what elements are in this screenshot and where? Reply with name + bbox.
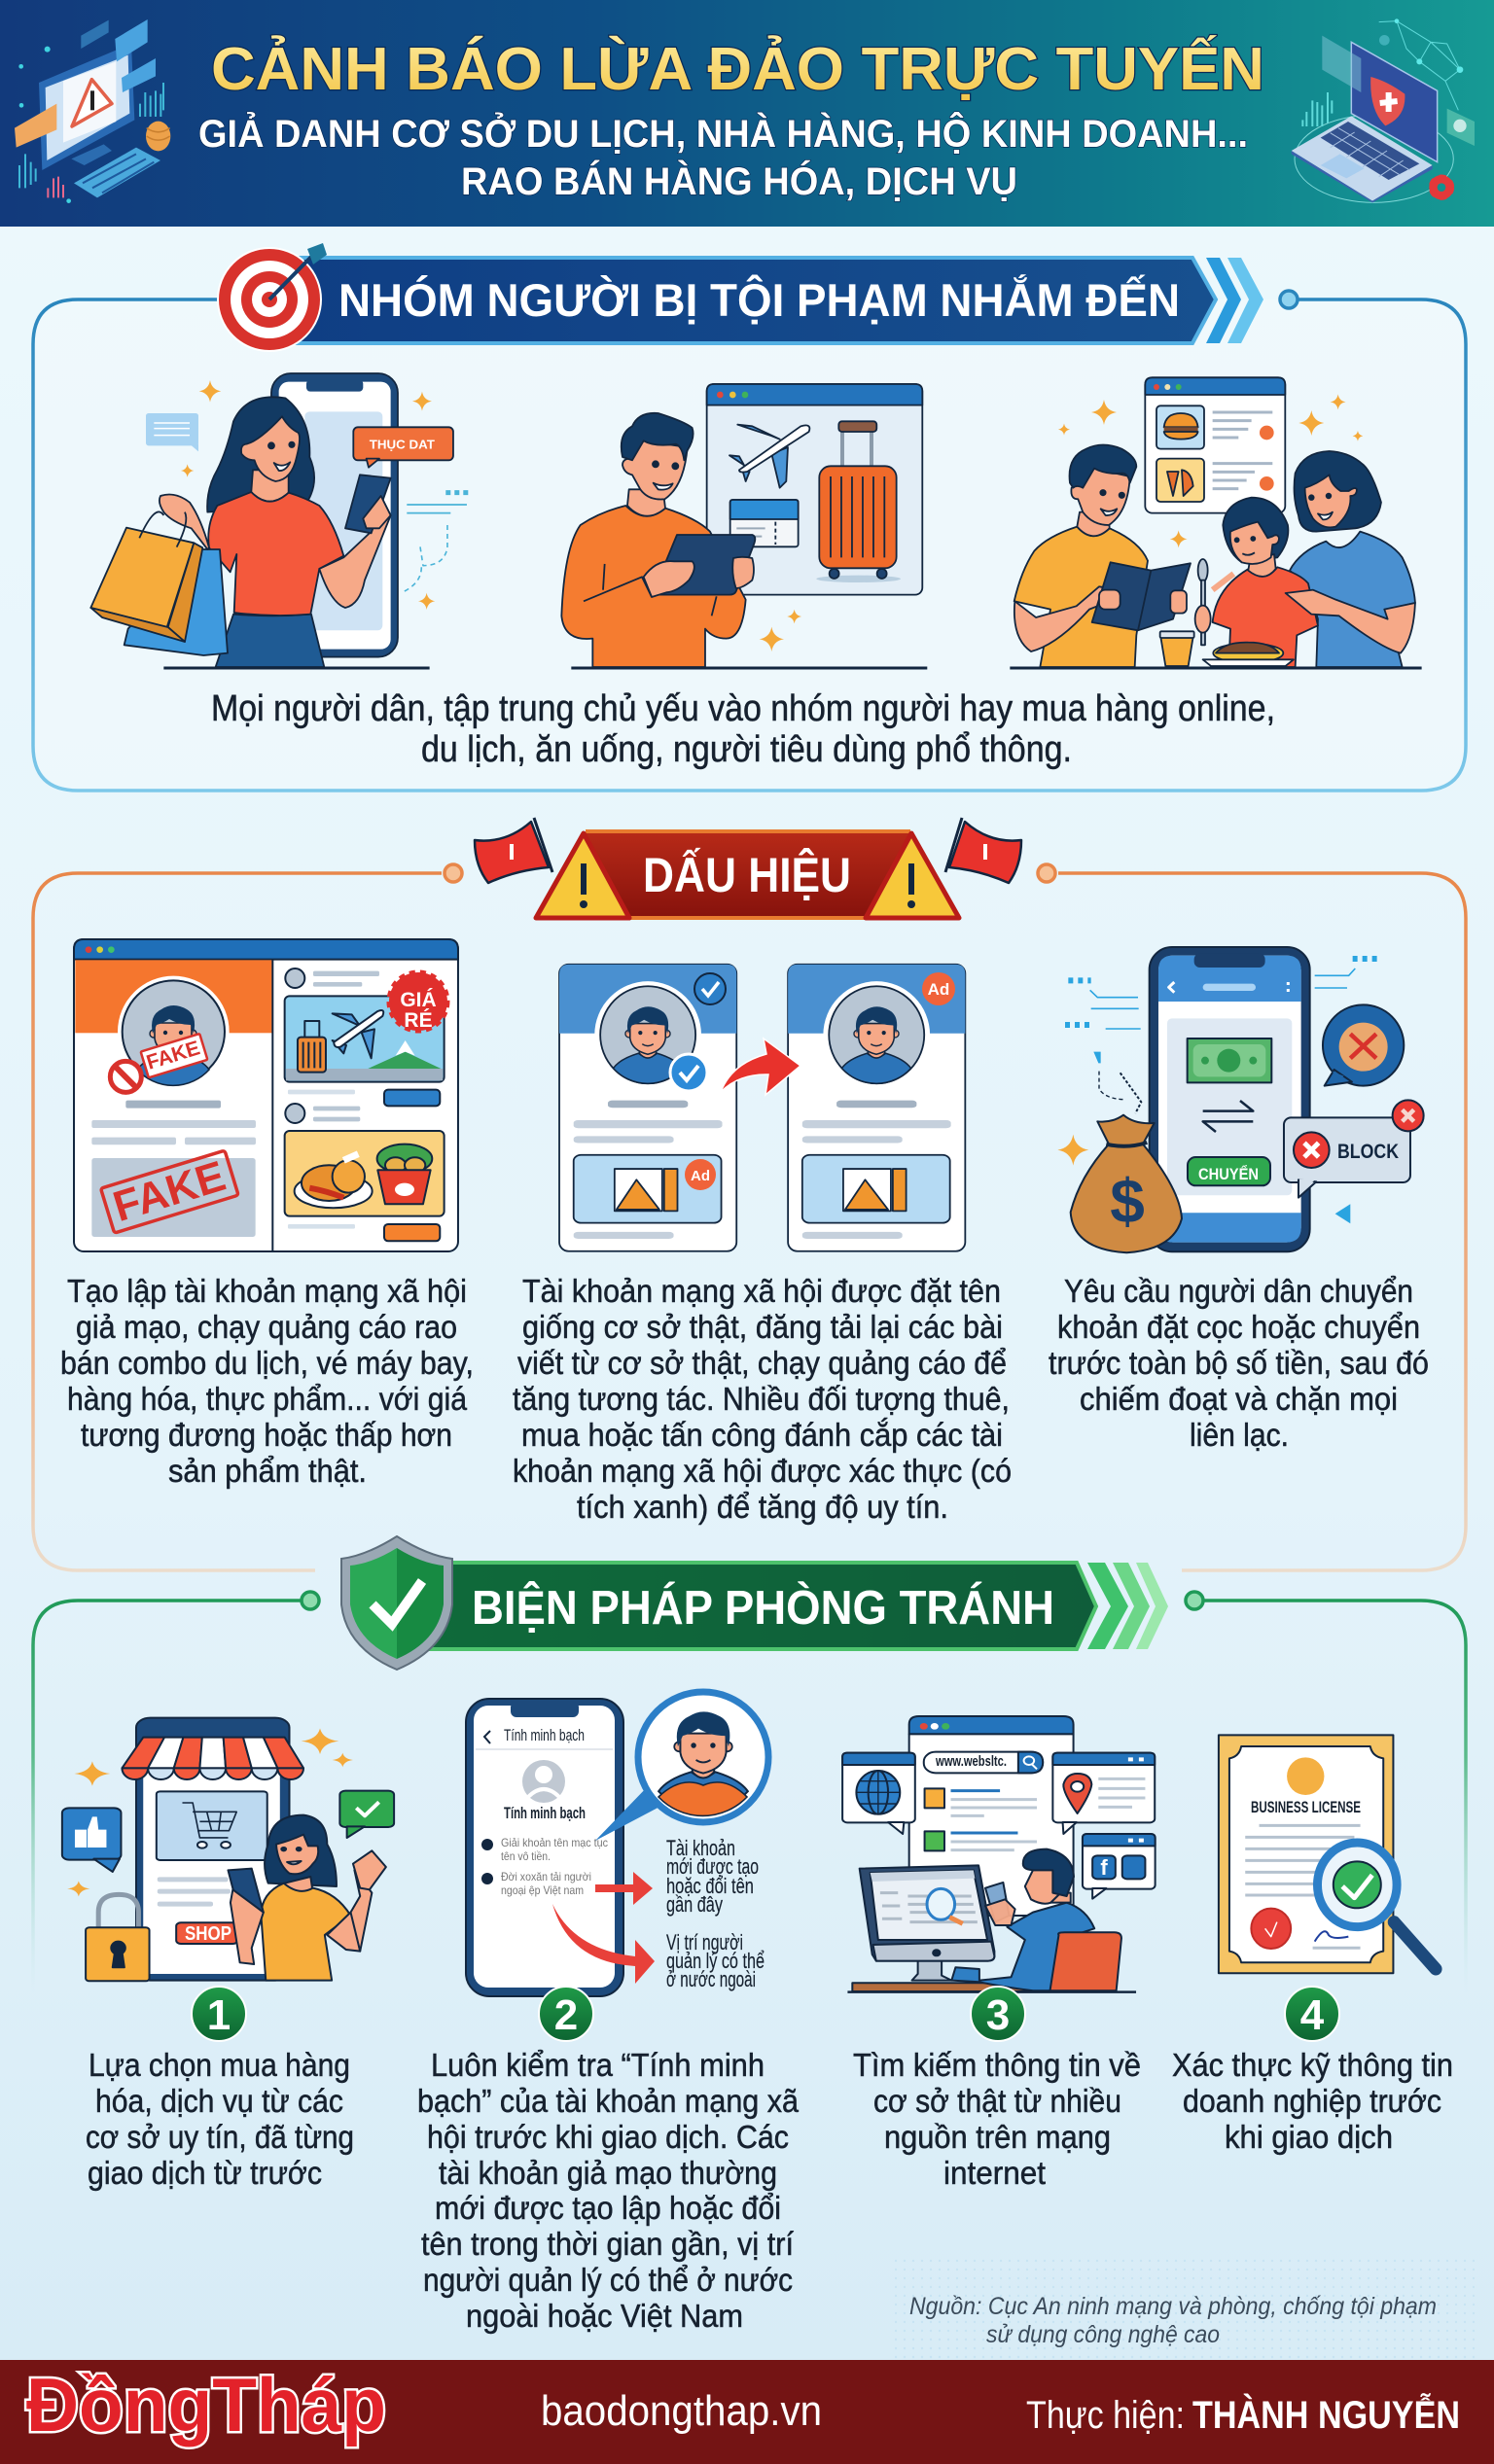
illustration: family dining	[1010, 377, 1422, 668]
illustration: transfer and block: $	[1110, 1166, 1145, 1236]
arrow: new account	[595, 1872, 653, 1905]
subtitle: RAO BÁN HÀNG HÓA, DỊCH VỤ	[461, 158, 1017, 203]
illustration: online shopper: THỤC DAT	[370, 438, 435, 452]
avatar bubble	[595, 1692, 768, 1841]
text: cloned accounts: giống cơ sở thật, đăng tải lại các bài	[522, 1309, 1003, 1345]
icon: shield laptop	[1292, 18, 1475, 202]
text: step 2: tên trong thời gian gần, vị trí	[421, 2226, 794, 2262]
illustration: transparency screen: hoặc đổi tên	[666, 1874, 754, 1898]
arrow: manager location	[552, 1904, 655, 1984]
text: fake accounts: giả mạo, chạy quảng cáo rao	[76, 1309, 457, 1345]
text: target group	[211, 688, 1275, 770]
text: step 4: Xác thực kỹ thông tin	[1172, 2047, 1453, 2083]
illustration: online shopper	[90, 373, 470, 668]
illustration: transparency screen: ngoại ệp Việt nam	[501, 1883, 584, 1897]
text: step 2: ngoài hoặc Việt Nam	[466, 2298, 743, 2334]
website: baodongthap.vn	[541, 2387, 822, 2435]
text: transfer request: chiếm đoạt và chặn mọi	[1080, 1381, 1398, 1417]
text: step 3: nguồn trên mạng	[884, 2119, 1111, 2155]
illustration: business license	[1219, 1735, 1436, 1973]
illustration: transparency screen: Tính minh bạch	[504, 1804, 586, 1822]
illustration: transparency screen: quản lý có thể	[666, 1949, 765, 1973]
text: transfer request: khoản đặt cọc hoặc chuyển	[1057, 1309, 1420, 1345]
source note	[909, 2293, 1437, 2348]
icon: verified badge	[670, 1054, 707, 1091]
text: cloned accounts: viết từ cơ sở thật, chạy quảng cáo để	[517, 1345, 1007, 1381]
illustration: cloned accounts	[559, 965, 965, 1251]
badge: step 1: 1	[207, 1991, 231, 2039]
illustration: trusted shop: SHOP	[185, 1923, 231, 1945]
illustration: transparency screen: Vị trí người	[666, 1930, 743, 1954]
illustration: traveller	[561, 384, 927, 668]
illustration: online research: www.websltc.	[935, 1753, 1007, 1770]
text: fake accounts: bán combo du lịch, vé máy bay,	[60, 1345, 474, 1381]
heading banner: warning signs: DẤU HIỆU	[643, 848, 851, 902]
heading banner: prevention: BIỆN PHÁP PHÒNG TRÁNH	[472, 1581, 1054, 1635]
illustration: transparency screen: Giải khoản tên mạc tục	[501, 1836, 608, 1849]
subtitle: GIẢ DANH CƠ SỞ DU LỊCH, NHÀ HÀNG, HỘ KINH DOANH...	[198, 111, 1248, 156]
illustration: transparency screen: ở nước ngoài	[666, 1967, 756, 1991]
text: transfer request: trước toàn bộ số tiền, sau đó	[1049, 1345, 1429, 1381]
badge: step 2: 2	[554, 1991, 578, 2039]
icon: ad badge	[922, 972, 955, 1005]
arrow	[721, 1038, 800, 1095]
illustration: fake account page: GIÁ	[400, 989, 437, 1011]
heading banner: warning signs	[475, 818, 1021, 918]
icon: small ad badge	[685, 1159, 716, 1190]
icon: warning monitor	[15, 19, 170, 203]
illustration: transparency screen: gần đây	[666, 1892, 723, 1917]
text: fake accounts: sản phẩm thật.	[168, 1453, 367, 1489]
source note: Nguồn: Cục An ninh mạng và phòng, chống tội phạm	[909, 2293, 1437, 2320]
illustration: trusted shop	[62, 1718, 394, 1981]
credit: Thực hiện:	[1026, 2394, 1185, 2437]
illustration: transparency screen	[466, 1692, 768, 1996]
illustration: transfer and block: CHUYỂN	[1198, 1165, 1259, 1183]
illustration: transparency screen: Tính minh bạch	[504, 1726, 585, 1744]
text: step 2: hội trước khi giao dịch. Các	[427, 2119, 789, 2155]
illustration: business license: BUSINESS LICENSE	[1251, 1798, 1361, 1816]
text: step 2	[417, 2047, 800, 2334]
panel: warning signs	[33, 818, 1466, 1570]
illustration: transparency screen: Tài khoản	[666, 1836, 735, 1860]
illustration: transparency screen: mới được tạo	[666, 1854, 759, 1879]
text: step 3	[853, 2047, 1141, 2191]
text: step 4	[1172, 2047, 1453, 2155]
text: fake accounts: tương đương hoặc thấp hơn	[81, 1417, 452, 1453]
text: step 2: bạch” của tài khoản mạng xã	[417, 2083, 800, 2119]
text: step 3: Tìm kiếm thông tin về	[853, 2047, 1141, 2083]
text: step 2: Luôn kiểm tra “Tính minh	[431, 2047, 765, 2083]
text: step 2: tài khoản giả mạo thường	[439, 2155, 777, 2191]
illustration: fake account page	[74, 939, 458, 1251]
icon: ad badge: Ad	[928, 980, 949, 999]
badge: step 3: 3	[986, 1991, 1010, 2039]
illustration: fake account page: FAKE	[144, 1037, 202, 1074]
decorative dots	[895, 2256, 1478, 2360]
text: target group: du lịch, ăn uống, người tiêu dùng phổ thông.	[421, 729, 1072, 770]
text: cloned accounts: tích xanh) để tăng độ uy tín.	[577, 1489, 948, 1525]
text: fake accounts: hàng hóa, thực phẩm... với giá	[67, 1381, 468, 1417]
text: step 4: khi giao dịch	[1225, 2119, 1393, 2155]
icon: small ad badge: Ad	[691, 1168, 710, 1184]
badge: step 3	[971, 1987, 1025, 2041]
text: cloned accounts: mua hoặc tấn công đánh cắp các tài	[521, 1417, 1003, 1453]
text: cloned accounts: tăng tương tác. Nhiều đối tượng thuê,	[513, 1381, 1010, 1417]
text: step 2: mới được tạo lập hoặc đổi	[435, 2190, 781, 2226]
illustration: transparency screen: Đời xoxăn tải người	[501, 1870, 591, 1883]
icon: verified check	[694, 973, 726, 1004]
text: transfer request: Yêu cầu người dân chuyển	[1064, 1273, 1413, 1309]
text: fake accounts: Tạo lập tài khoản mạng xã hội	[67, 1273, 467, 1309]
text: step 3: internet	[943, 2155, 1046, 2191]
illustration: transfer and block: BLOCK	[1337, 1141, 1399, 1163]
illustration: fake account page: FAKE	[108, 1152, 231, 1231]
text: step 1: giao dịch từ trước	[88, 2155, 322, 2191]
heading banner: target group: NHÓM NGƯỜI BỊ TỘI PHẠM NHẮM ĐẾN	[338, 274, 1180, 326]
title: CẢNH BÁO LỪA ĐẢO TRỰC TUYẾN	[211, 36, 1264, 103]
illustration: online research: f	[1100, 1855, 1108, 1880]
badge: step 1	[192, 1987, 246, 2041]
subtitle	[198, 111, 1248, 203]
badge: step 2	[539, 1987, 593, 2041]
footer	[0, 2360, 1494, 2464]
text: step 1: Lựa chọn mua hàng	[89, 2047, 350, 2083]
illustration: online research	[842, 1716, 1156, 1992]
panel: target group	[33, 243, 1466, 791]
text: transfer request: liên lạc.	[1190, 1417, 1289, 1453]
credit	[1026, 2392, 1460, 2437]
text: step 4: doanh nghiệp trước	[1183, 2083, 1441, 2119]
text: step 3: cơ sở thật từ nhiều	[873, 2083, 1121, 2119]
text: step 1: cơ sở uy tín, đã từng	[86, 2119, 354, 2155]
text: cloned accounts	[513, 1273, 1012, 1525]
panel: prevention	[33, 1536, 1466, 2348]
heading banner: target group	[218, 243, 1263, 351]
text: target group: Mọi người dân, tập trung chủ yếu vào nhóm người hay mua hàng online,	[211, 688, 1275, 729]
text: step 1: hóa, dịch vụ từ các	[95, 2083, 343, 2119]
illustration: transfer and block	[1057, 947, 1424, 1252]
text: step 1	[86, 2047, 354, 2191]
text: transfer request	[1049, 1273, 1429, 1453]
text: fake accounts	[60, 1273, 474, 1489]
badge: step 4	[1285, 1987, 1339, 2041]
text: cloned accounts: Tài khoản mạng xã hội được đặt tên	[522, 1273, 1001, 1309]
heading banner: prevention	[341, 1536, 1168, 1670]
text: cloned accounts: khoản mạng xã hội được xác thực (có	[513, 1453, 1012, 1489]
text: step 2: người quản lý có thể ở nước	[423, 2262, 793, 2298]
illustration: transparency screen: tên vô tiền.	[501, 1849, 551, 1863]
header band	[0, 0, 1494, 227]
badge: step 4: 4	[1300, 1991, 1325, 2039]
source note: sử dụng công nghệ cao	[986, 2321, 1220, 2348]
illustration: fake account page: RÉ	[404, 1009, 433, 1032]
logo: ĐồngTháp	[26, 2362, 386, 2447]
